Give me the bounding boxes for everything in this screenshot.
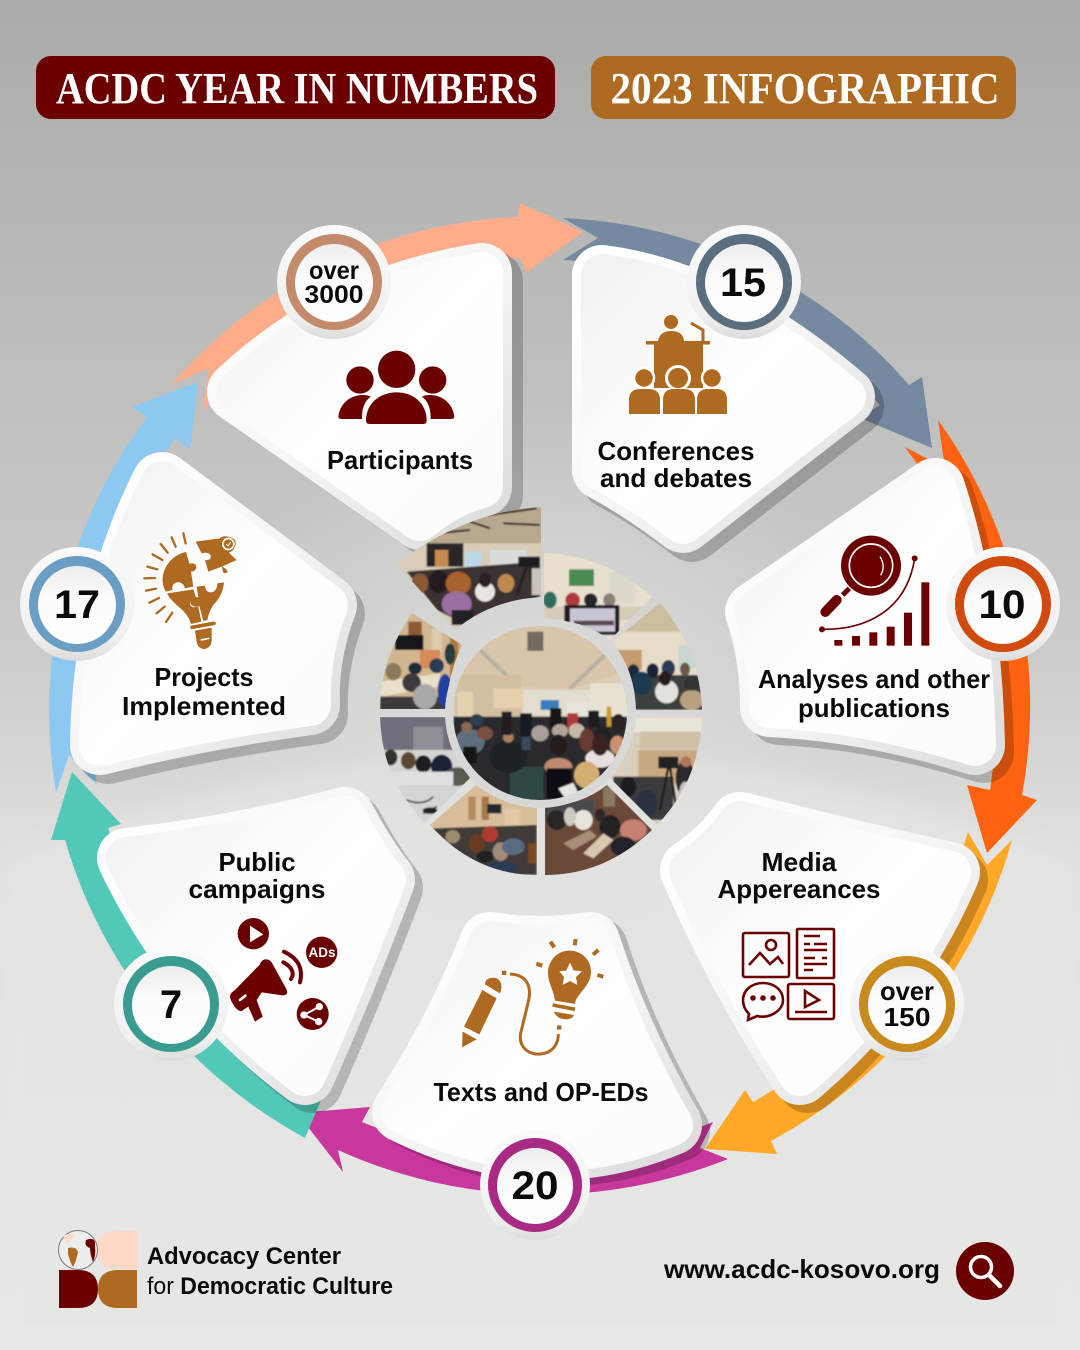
panel: media appereances: Appereances [718,874,880,904]
panel: texts and op-eds [402,939,680,1156]
icon: megaphone with play, ads and share [230,918,337,1030]
cycle arrow: analyses (orange) [905,420,1037,853]
cycle arrow: conferences (slate) [563,218,932,448]
photo: table lower left [380,717,470,822]
panel: projects implemented: Implemented [122,691,286,721]
badge: 7: 7 [160,983,182,1027]
website url: www.acdc-kosovo.org [663,1254,940,1284]
badge: over 3000: over [309,257,359,285]
panel: conferences and debates [598,275,854,532]
cycle arrow: media (amber) [705,832,1012,1154]
logo wordmark: Advocacy Center [147,1243,341,1270]
badge: over 3000 [277,225,391,339]
badge: 10: 10 [978,583,1026,627]
badge: 20: 20 [512,1164,558,1208]
badge: over 3000: 3000 [304,281,364,309]
panel: public campaigns [127,817,393,1083]
badge: 10 [946,547,1060,661]
badge: over 150 [850,947,964,1061]
title banner: ACDC year in numbers: ACDC YEAR IN NUMBERS [56,64,538,113]
photo: conference room top left [396,507,541,630]
badge: 17 [20,547,134,661]
badge: over 150: over [880,976,934,1006]
photo: panel with screen [543,552,653,642]
title banner: ACDC year in numbers [36,56,555,119]
ring around central photo [445,618,635,808]
cycle arrow: participants (peach) [172,203,583,410]
icon: puzzle lightbulb [144,533,237,649]
panel: participants [237,273,493,528]
panel: public campaigns: campaigns [188,874,326,904]
badge: 17: 17 [54,583,100,627]
cycle arrow: projects (light blue) [49,382,198,793]
panel: analyses and publications: publications [798,693,950,723]
photo: panel right upper [612,603,702,710]
panel: conferences and debates: and debates [600,463,752,493]
photo: meeting bottom left [427,783,538,877]
icon: people group [338,351,454,424]
label: conferences and debates: Conferences [598,436,754,466]
photo: audience bottom right [544,785,654,877]
panel: projects implemented [100,482,335,754]
photo: central audience [453,626,627,800]
badge: 15: 15 [720,261,766,305]
logo: ACDC [58,1230,393,1308]
icon: speaker and audience [629,315,727,414]
photo collage [378,507,707,877]
icon: search [956,1242,1014,1300]
icon: pencil and lightbulb [462,939,603,1054]
label: analyses and other publications: Analyses and other [758,664,990,694]
label: participants: Participants [327,445,473,475]
photo: meeting upper left [380,613,462,709]
panel: analyses and publications [755,488,990,753]
badge: 15 [687,225,801,339]
panel: public campaigns: ADs [308,945,336,960]
icon: media tiles [743,929,834,1020]
badge: 7 [114,947,228,1061]
badge: 20 [480,1130,590,1240]
label: texts and op-eds: Texts and OP-EDs [434,1077,648,1107]
label: projects implemented: Projects [154,662,254,692]
label: media appereances: Media [762,847,837,877]
cycle arrow: campaigns (teal) [51,772,322,1138]
label: public campaigns: Public [218,847,296,877]
photo: camera right lower [610,717,703,827]
icon: magnifier and rising bars [819,536,929,646]
logo: ACDC: for Democratic Culture [147,1273,393,1300]
title banner: 2023 infographic: 2023 INFOGRAPHIC [610,64,1000,113]
badge: over 150: 150 [884,1002,930,1032]
cycle arrow: texts (magenta) [297,1107,728,1194]
panel: media appereances [690,822,958,1083]
